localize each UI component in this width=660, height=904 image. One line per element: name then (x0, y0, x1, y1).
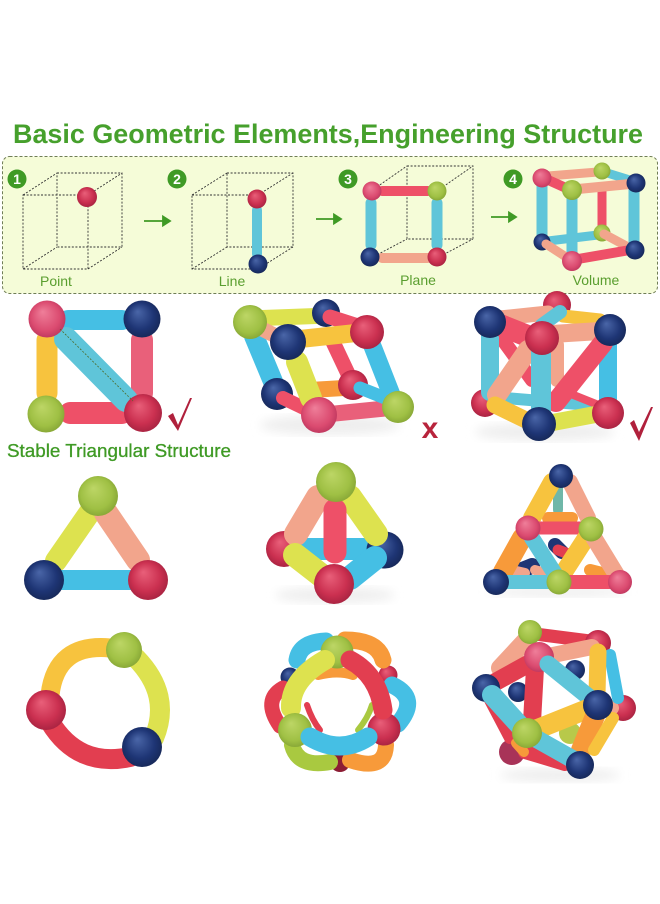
arrow 1 (144, 216, 170, 226)
model: flat triangle (24, 476, 168, 600)
title: Basic Geometric Elements,Engineering Structure (13, 119, 643, 149)
badge 4: 4 (509, 171, 517, 187)
volume cube (532, 162, 646, 271)
arrow 3 (491, 212, 516, 222)
step 2: line (168, 170, 293, 289)
model: stable square with diagonal (28, 300, 162, 432)
model: straight sphere (472, 620, 636, 782)
wireframe cube 3 (371, 166, 473, 258)
step 3: plane (338, 166, 473, 288)
arrow 2 (316, 214, 341, 224)
caption: stable triangular structure: Stable Triangular Structure (7, 440, 231, 461)
model: ring (26, 632, 162, 767)
label: volume: Volume (573, 272, 620, 288)
model: curved sphere (272, 636, 408, 772)
panel: geometric elements (2, 156, 658, 294)
wireframe cube 2 (192, 173, 293, 269)
badge 1: 1 (13, 171, 21, 187)
cross mark: x (422, 412, 439, 445)
step 1: point (8, 170, 122, 289)
badge 3: 3 (344, 171, 352, 187)
model: large pyramid (483, 464, 632, 597)
model: small pyramid (266, 462, 404, 604)
step 4: volume (504, 162, 646, 288)
model: unstable parallelepiped (233, 299, 414, 435)
label: line: Line (219, 273, 245, 289)
badge 2: 2 (173, 171, 181, 187)
plane rods and balls (360, 182, 446, 266)
model: stable cube (471, 291, 626, 441)
check mark 2 (630, 407, 653, 441)
line rod and balls (248, 190, 268, 274)
label: point: Point (40, 273, 72, 289)
badge 4 (504, 170, 522, 188)
check mark 1 (168, 398, 192, 431)
label: plane: Plane (400, 272, 436, 288)
wireframe cube 1 (23, 173, 122, 269)
point ball (77, 187, 97, 207)
